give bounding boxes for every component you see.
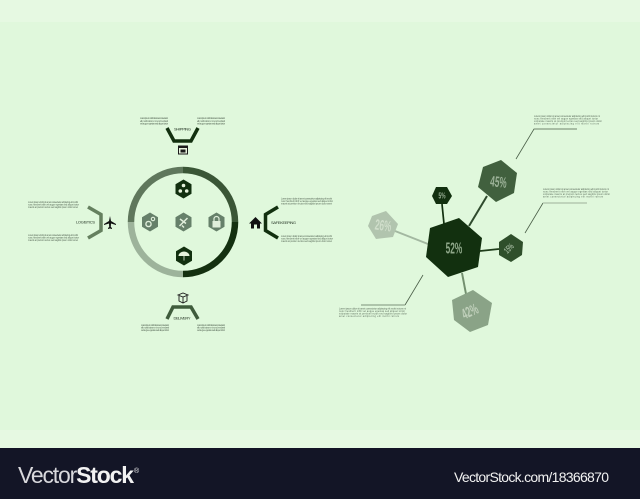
- icon: airplane: [104, 216, 116, 229]
- icon: plane hexagon: [176, 212, 192, 232]
- logistics upper text: Lorem ipsum dolor sit amet consectetur adipiscing elit morbi: [28, 201, 78, 204]
- icon: house: [249, 217, 262, 228]
- safekeeping section: [249, 198, 333, 243]
- hexagon: 52%: [426, 218, 482, 277]
- safekeeping lower text: mauris at pretium lectus sed sagittis ipsum dolor amet: [281, 240, 332, 243]
- logistics upper text: nunc hendrerit nibh vel augue egestas sed aliquet tortor: [28, 204, 79, 206]
- callout: lower left: amet consectetur adipiscing elit morbi rutrum: [339, 315, 399, 318]
- footer logo: VectorStock: [18, 462, 134, 488]
- hexagon: 45%: [478, 160, 517, 202]
- hexagon: 5%: [432, 187, 452, 204]
- callout: middle right: amet consectetur adipiscing elit morbi rutrum: [543, 196, 603, 198]
- callout: lower left: nunc hendrerit nibh vel augue egestas sed aliquet tortor: [339, 310, 405, 313]
- shipping label: SHIPPING: [174, 126, 191, 132]
- delivery right text: elit morbi rutrum mi nunc hendrerit: [197, 326, 225, 330]
- ring chart: [131, 170, 235, 274]
- delivery bracket: [167, 307, 198, 319]
- delivery right text: Lorem ipsum dolor sit amet consectetur: [197, 324, 225, 327]
- icon: umbrella hexagon: [176, 246, 192, 266]
- shipping left text: elit morbi rutrum mi nunc hendrerit: [140, 120, 168, 123]
- logistics section: [28, 201, 116, 242]
- logistics upper text: mauris at pretium lectus sed sagittis ipsum dolor amet: [28, 206, 78, 209]
- hexagon: 15%: 15%: [501, 241, 517, 256]
- callout: lower left: vulputate mauris at pretium lectus sed sagittis ipsum dolor: [339, 312, 407, 316]
- hexagon: 52%: 52%: [446, 238, 462, 257]
- shipping left text: vel augue egestas sed aliquet tortor: [140, 123, 168, 126]
- delivery label: DELIVERY: [174, 316, 191, 320]
- callout: top right: vulputate mauris at pretium lectus sed sagittis ipsum dolor: [534, 120, 602, 123]
- logistics bracket: [88, 207, 101, 238]
- callout: middle right: Lorem ipsum dolor sit amet consectetur adipiscing elit morbi rutrum mi: [543, 188, 609, 191]
- delivery right text: vel augue egestas sed aliquet tortor: [197, 329, 225, 332]
- callout: lower left: [339, 275, 423, 318]
- callout: lower left: Lorem ipsum dolor sit amet consectetur adipiscing elit morbi rutrum mi: [339, 308, 406, 310]
- connector lines: [395, 196, 499, 294]
- logistics lower text: mauris at pretium lectus sed sagittis ipsum dolor amet: [28, 239, 78, 242]
- callout: middle right: nunc hendrerit nibh vel augue egestas sed aliquet tortor: [543, 190, 608, 194]
- safekeeping lower text: Lorem ipsum dolor sit amet consectetur adipiscing elit morbi: [281, 235, 332, 238]
- registered mark: ®: [134, 467, 140, 475]
- safekeeping label: SAFEKEEPING: [271, 220, 296, 225]
- delivery left text: vel augue egestas sed aliquet tortor: [141, 329, 169, 332]
- shipping bracket: [167, 128, 198, 141]
- callout: middle right: vulputate mauris at pretium lectus sed sagittis ipsum dolor: [543, 193, 610, 196]
- callout: top right: [516, 115, 602, 159]
- callout: middle right: [525, 188, 610, 233]
- icon: lock hexagon: [208, 212, 224, 232]
- logistics lower text: nunc hendrerit nibh vel augue egestas sed aliquet tortor: [28, 236, 79, 240]
- hexagon: 26%: [368, 211, 398, 239]
- shipping section: [140, 117, 225, 154]
- shipping right text: elit morbi rutrum mi nunc hendrerit: [197, 120, 225, 123]
- hexagon: 45%: 45%: [489, 173, 508, 192]
- logistics label: LOGISTICS: [76, 220, 95, 224]
- icon: box: [178, 293, 188, 303]
- safekeeping lower text: nunc hendrerit nibh vel augue egestas sed aliquet tortor: [281, 238, 333, 240]
- footer bar: [0, 448, 640, 499]
- shipping left text: Lorem ipsum dolor sit amet consectetur: [140, 117, 168, 120]
- safekeeping upper text: nunc hendrerit nibh vel augue egestas sed aliquet tortor: [281, 200, 333, 203]
- safekeeping upper text: mauris at pretium lectus sed sagittis ipsum dolor amet: [281, 202, 332, 206]
- delivery left text: Lorem ipsum dolor sit amet consectetur: [141, 324, 169, 327]
- hexagon: 26%: 26%: [374, 216, 393, 235]
- callout: top right: amet consectetur adipiscing elit morbi rutrum: [534, 122, 599, 126]
- hexagon: 42%: [452, 290, 492, 332]
- icon: gears hexagon: [142, 212, 158, 232]
- delivery section: [141, 293, 225, 332]
- callout: top right: nunc hendrerit nibh vel augue egestas sed aliquet tortor: [534, 118, 598, 120]
- safekeeping upper text: Lorem ipsum dolor sit amet consectetur adipiscing elit morbi: [281, 198, 332, 200]
- delivery left text: elit morbi rutrum mi nunc hendrerit: [141, 326, 169, 330]
- shipping right text: Lorem ipsum dolor sit amet consectetur: [197, 117, 225, 120]
- icon: radiation hexagon: [176, 180, 192, 198]
- hexagon: 42%: 42%: [459, 300, 481, 323]
- hexagon: 15%: [499, 234, 523, 262]
- safekeeping bracket: [266, 207, 278, 238]
- shipping right text: vel augue egestas sed aliquet tortor: [197, 123, 225, 126]
- logistics lower text: Lorem ipsum dolor sit amet consectetur adipiscing elit morbi: [28, 234, 78, 237]
- footer url: VectorStock.com/18366870: [454, 469, 609, 485]
- callout: top right: Lorem ipsum dolor sit amet consectetur adipiscing elit morbi rutrum mi: [534, 115, 600, 118]
- hexagon: 5%: 5%: [439, 192, 446, 201]
- icon: calendar: [178, 146, 188, 154]
